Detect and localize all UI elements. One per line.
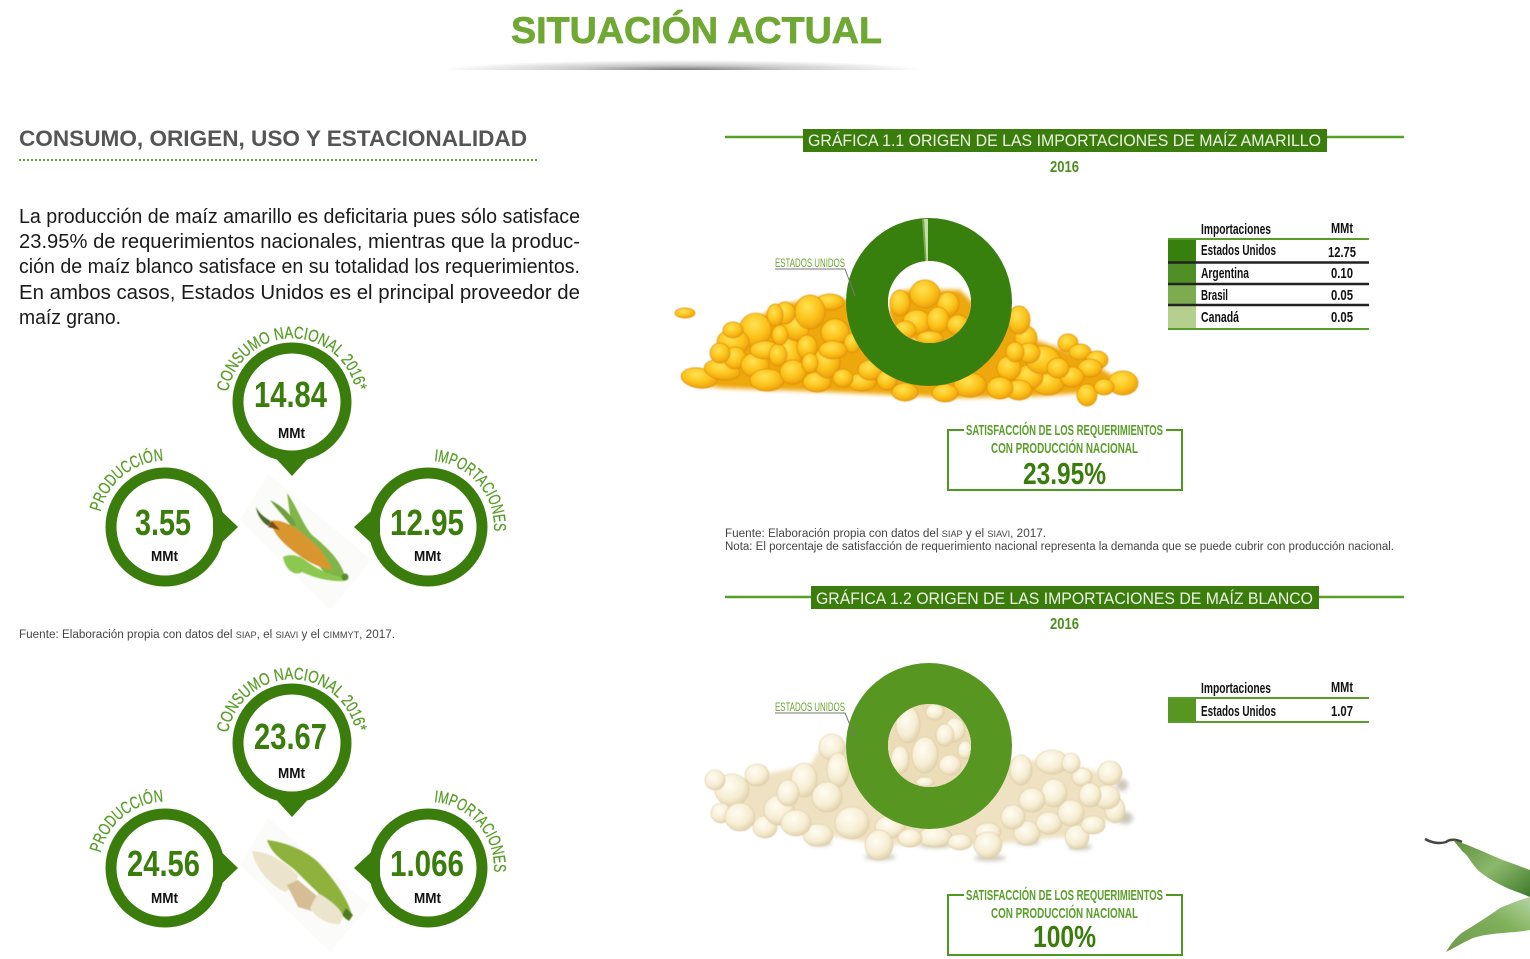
title: SITUACIÓN ACTUAL <box>511 9 882 51</box>
stat: importaciones: IMPORTACIONES <box>435 449 506 531</box>
icon: yellow corn cob <box>240 474 372 610</box>
image: yellow corn kernels <box>675 294 1138 406</box>
image: white corn kernels <box>705 734 1133 861</box>
stat: importaciones blanco: MMt <box>414 890 441 907</box>
source note left: Fuente: Elaboración propia con datos del SIAP, el SIAVI y el CIMMYT, 2017. <box>19 629 395 641</box>
intro text block <box>19 206 580 329</box>
callout: estados unidos 1.1: ESTADOS UNIDOS <box>775 256 845 270</box>
table 1.1: Importaciones <box>1201 221 1271 238</box>
table 1.1: Estados Unidos <box>1201 242 1276 259</box>
stat: importaciones blanco: IMPORTACIONES <box>435 790 506 872</box>
stat: producción blanco: PRODUCCIÓN <box>89 788 162 852</box>
callout box 1.1: 23.95% <box>1023 456 1106 491</box>
callout: estados unidos 1.2: ESTADOS UNIDOS <box>775 700 845 714</box>
callout box 1.2 <box>948 886 1182 955</box>
stat: producción: 3.55 <box>135 502 191 543</box>
stat: producción <box>89 448 238 586</box>
callout box 1.2: 100% <box>1033 919 1096 954</box>
table 1.1: 0.10 <box>1331 265 1353 282</box>
stat: consumo nacional blanco: MMt <box>278 765 305 782</box>
stat: importaciones blanco <box>354 790 506 928</box>
table 1.2 <box>1168 679 1369 722</box>
intro text block: La producción de maíz amarillo es deficitaria pues sólo satisface <box>19 206 580 228</box>
table 1.2: Importaciones <box>1201 680 1271 697</box>
stat: consumo nacional <box>217 326 367 476</box>
stat: importaciones blanco: 1.066 <box>390 843 464 884</box>
intro text block: maíz grano. <box>19 307 121 329</box>
panel: balance maíz amarillo <box>89 326 506 586</box>
table 1.1: MMt <box>1331 220 1353 237</box>
table 1.1: 0.05 <box>1331 309 1353 326</box>
stat: producción: PRODUCCIÓN <box>89 448 162 512</box>
table 1.1 <box>1168 220 1369 329</box>
section heading: CONSUMO, ORIGEN, USO Y ESTACIONALIDAD <box>19 126 527 151</box>
chart heading 1.1 <box>725 129 1404 176</box>
chart heading 1.1: GRÁFICA 1.1 ORIGEN DE LAS IMPORTACIONES DE MAÍZ AMARILLO <box>808 131 1321 150</box>
chart heading 1.2 <box>725 586 1404 633</box>
source note chart 1.1: Fuente: Elaboración propia con datos del SIAP y el SIAVI, 2017. <box>725 528 1046 540</box>
chart heading 1.2: 2016 <box>1050 616 1079 633</box>
chart heading 1.1: 2016 <box>1050 159 1079 176</box>
stat: consumo nacional: 14.84 <box>254 374 327 415</box>
table 1.1: Argentina <box>1201 265 1249 282</box>
table 1.1: 12.75 <box>1328 244 1356 261</box>
table 1.1: Brasil <box>1201 287 1228 304</box>
donut chart 1.1 <box>846 218 1012 386</box>
stat: producción blanco: MMt <box>151 890 178 907</box>
intro text block: En ambos casos, Estados Unidos es el principal proveedor de <box>19 282 580 304</box>
source note chart 1.1 <box>725 528 1394 553</box>
stat: consumo nacional blanco: CONSUMO NACIONAL 2016* <box>217 667 367 732</box>
stat: importaciones: 12.95 <box>390 502 464 543</box>
table 1.2: MMt <box>1331 679 1353 696</box>
callout box 1.1: CON PRODUCCIÓN NACIONAL <box>991 439 1138 457</box>
icon: white corn cob <box>240 818 370 952</box>
stat: importaciones: MMt <box>414 548 441 565</box>
stat: importaciones <box>354 449 506 586</box>
table 1.2: Estados Unidos <box>1201 703 1276 720</box>
table 1.1: Canadá <box>1201 309 1239 326</box>
table 1.1: 0.05 <box>1331 287 1353 304</box>
callout box 1.2: CON PRODUCCIÓN NACIONAL <box>991 904 1138 922</box>
panel: balance maíz blanco <box>89 667 506 928</box>
title <box>440 9 925 70</box>
source note chart 1.1: Nota: El porcentaje de satisfacción de requerimiento nacional representa la demanda que se puede cubrir con producción nacional. <box>725 541 1394 553</box>
chart heading 1.2: GRÁFICA 1.2 ORIGEN DE LAS IMPORTACIONES DE MAÍZ BLANCO <box>816 589 1313 608</box>
intro text block: ción de maíz blanco satisface en su totalidad los requerimientos. <box>19 256 580 278</box>
stat: consumo nacional blanco: 23.67 <box>254 716 327 757</box>
callout: estados unidos 1.2 <box>775 700 855 737</box>
callout: estados unidos 1.1 <box>775 256 855 296</box>
callout box 1.1: SATISFACCIÓN DE LOS REQUERIMIENTOS <box>966 421 1163 439</box>
donut chart 1.2 <box>846 663 1012 829</box>
stat: producción: MMt <box>151 548 178 565</box>
callout box 1.2: SATISFACCIÓN DE LOS REQUERIMIENTOS <box>966 886 1163 904</box>
intro text block: 23.95% de requerimientos nacionales, mientras que la produc- <box>19 231 580 253</box>
stat: consumo nacional: CONSUMO NACIONAL 2016* <box>217 326 367 390</box>
table 1.2: 1.07 <box>1331 703 1353 720</box>
stat: producción blanco: 24.56 <box>127 843 200 884</box>
icon: corn leaves <box>1425 839 1530 952</box>
stat: consumo nacional blanco <box>217 667 367 817</box>
stat: consumo nacional: MMt <box>278 425 305 442</box>
callout box 1.1 <box>948 421 1182 491</box>
stat: producción blanco <box>89 788 238 928</box>
